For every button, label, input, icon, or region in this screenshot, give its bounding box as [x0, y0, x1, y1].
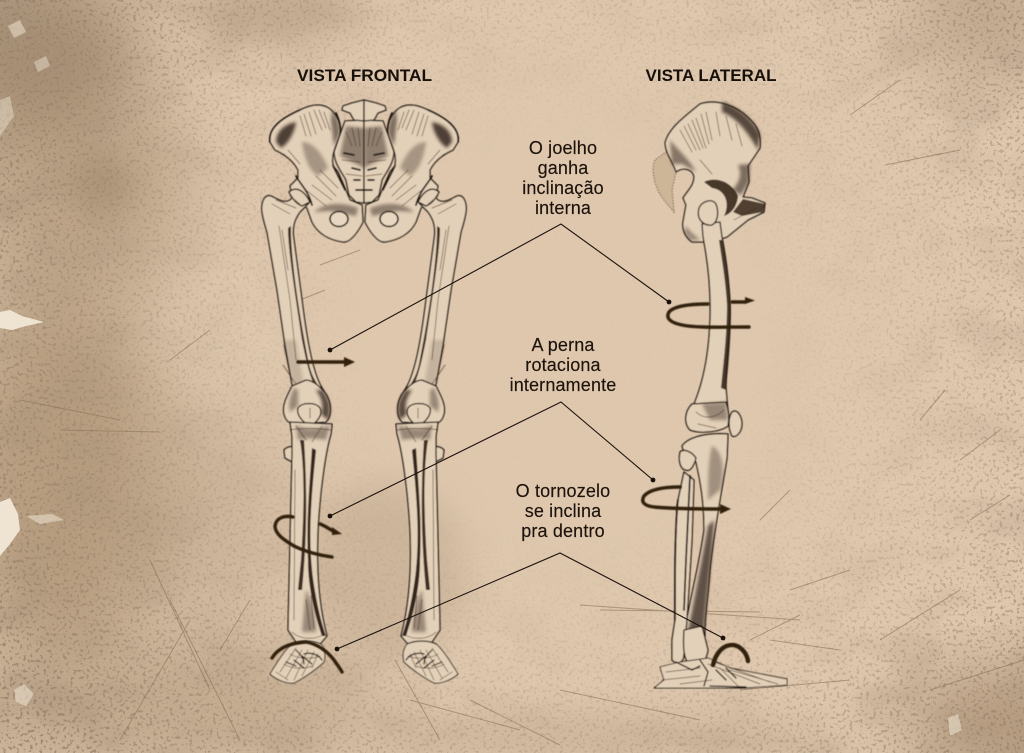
leader line: joelho — [328, 224, 671, 352]
arrow: femur rotation lateral — [668, 297, 755, 327]
arrow: ankle frontal — [272, 642, 342, 672]
leader line: perna — [328, 402, 655, 518]
callout: tornozelo — [335, 481, 725, 651]
heading: vista lateral: VISTA LATERAL — [646, 66, 776, 85]
callout: joelho: O joelho — [529, 138, 597, 158]
callout: tornozelo: pra dentro — [521, 521, 605, 541]
callout: tornozelo: se inclina — [525, 501, 602, 521]
callout: joelho: ganha — [538, 158, 589, 178]
callout: perna: rotaciona — [525, 355, 602, 375]
arrow: ankle lateral — [713, 645, 748, 665]
arrow: lower leg rotation frontal — [275, 516, 342, 557]
arrow: lower leg rotation lateral — [643, 487, 731, 514]
leader line: tornozelo — [335, 553, 725, 651]
callout: perna — [328, 335, 655, 518]
heading: vista frontal: VISTA FRONTAL — [297, 66, 432, 85]
arrow: femur frontal — [298, 357, 355, 367]
callout: joelho: inclinação — [522, 178, 604, 198]
callout: perna: A perna — [531, 335, 595, 355]
callout: tornozelo: O tornozelo — [516, 481, 610, 501]
callout: perna: internamente — [510, 375, 616, 395]
skeleton: lateral view — [653, 102, 787, 688]
skeleton: frontal view — [262, 100, 466, 683]
callout: joelho — [328, 138, 671, 352]
callout: joelho: interna — [535, 198, 592, 218]
